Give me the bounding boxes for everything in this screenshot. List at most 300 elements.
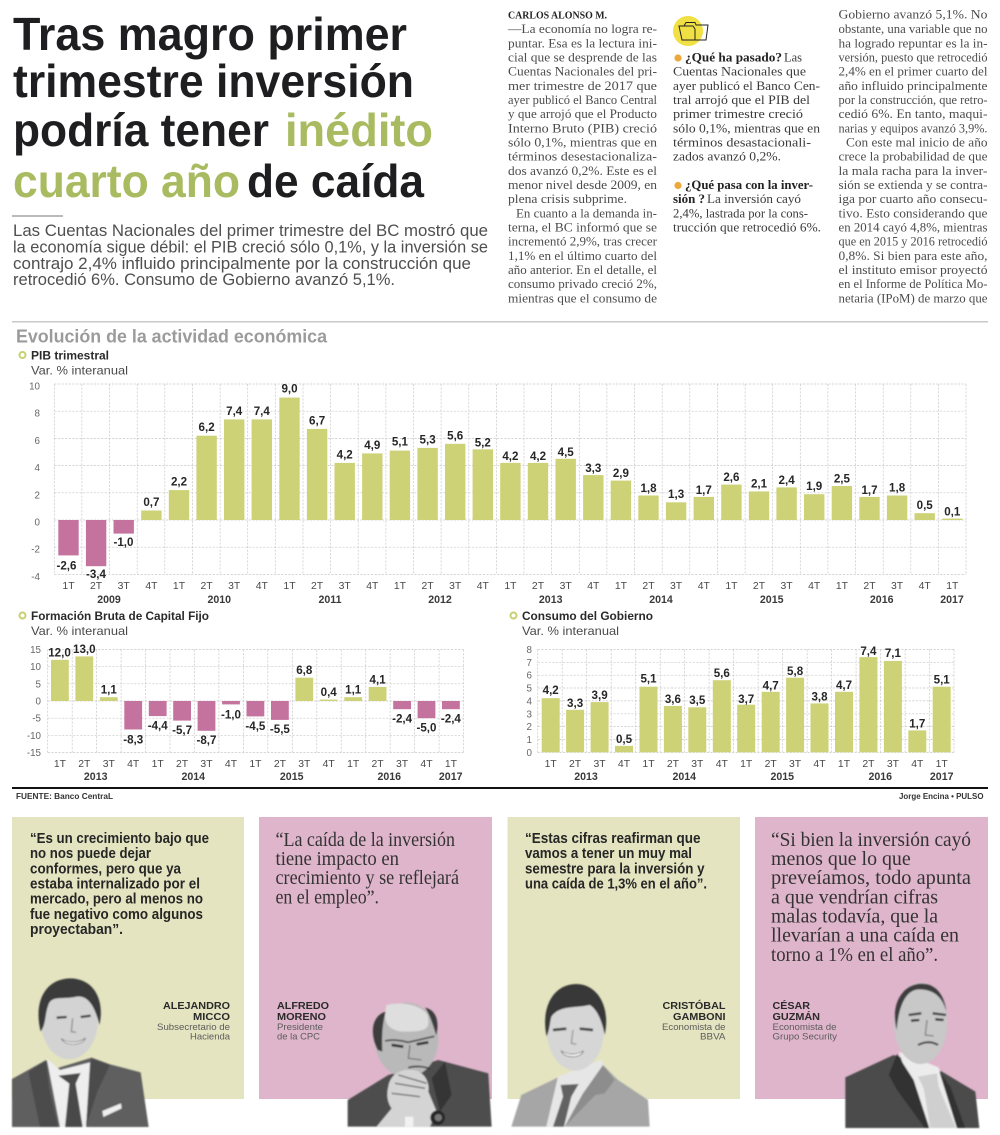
standfirst text block — [12, 216, 488, 289]
panel: Alfredo Moreno quote — [259, 817, 492, 1127]
name and role: de la CPC — [277, 1032, 320, 1043]
quote text: torno a 1% en el año”. — [771, 944, 938, 966]
portrait: César Guzmán — [845, 983, 979, 1128]
value labels: 5,3 — [420, 433, 436, 446]
x axis quarter labels: 1T — [394, 581, 407, 592]
article column 3: la mala racha para la inver- — [838, 164, 988, 178]
x axis quarter labels — [545, 759, 948, 770]
x axis year labels: 2014 — [673, 771, 696, 783]
x axis quarter labels: 4T — [366, 581, 379, 592]
chart heading: Consumo del Gobierno — [510, 609, 653, 638]
y axis labels: 4 — [527, 696, 533, 707]
x axis quarter labels: 4T — [225, 759, 238, 770]
value labels: 2,4 — [779, 474, 795, 487]
x axis year labels: 2016 — [378, 771, 401, 783]
article column 2: key questions: La inversión cayó — [707, 192, 801, 206]
x axis quarter labels: 3T — [449, 581, 462, 592]
quote text: menos que lo que — [771, 848, 911, 870]
title: trimestre inversión — [13, 55, 414, 107]
x axis quarter labels: 4T — [323, 759, 335, 770]
article column 2: key questions — [673, 50, 821, 235]
name and role: Grupo Security — [772, 1032, 837, 1043]
credit: Jorge Encina • PULSO — [899, 791, 984, 801]
x axis year labels: 2013 — [84, 771, 108, 783]
y axis labels — [29, 382, 41, 583]
value labels: -2,6 — [57, 560, 77, 572]
name and role: GAMBONI — [673, 1012, 726, 1023]
x axis quarter labels: 2T — [201, 581, 213, 592]
chart heading: Consumo del Gobierno: Var. % interanual — [522, 624, 619, 638]
article column 1: mientras que el consumo de — [508, 291, 657, 305]
name and role — [157, 1001, 231, 1043]
quote text: mercado, pero al menos no — [30, 892, 203, 908]
x axis quarter labels: 2T — [642, 581, 655, 592]
y axis labels: -4 — [31, 572, 41, 583]
x axis quarter labels: 3T — [560, 581, 572, 592]
x axis quarter labels: 1T — [249, 759, 262, 770]
portrait: Alejandro Micco — [12, 978, 149, 1127]
quote text: proyectaban”. — [30, 922, 123, 938]
x axis quarter labels: 3T — [789, 759, 802, 770]
article column 2: key questions: términos desastacionali- — [673, 136, 811, 150]
article column 1: 1,1% en el último cuarto del — [508, 249, 658, 263]
quote text: conformes, pero que ya — [30, 861, 182, 877]
value labels: 5,8 — [787, 665, 804, 678]
value labels: 2,2 — [171, 476, 187, 489]
x axis year labels: 2015 — [771, 771, 794, 783]
article column 3: año influido principalmente — [838, 79, 988, 93]
standfirst text block: Las Cuentas Nacionales del primer trimestre del BC mostró que — [13, 222, 488, 240]
article column 3: narias y equipos avanzó 3,9%. — [838, 121, 988, 135]
positive bars — [141, 398, 962, 520]
y axis labels: 0 — [36, 696, 42, 708]
x axis quarter labels: 1T — [725, 581, 738, 592]
value labels: 12,0 — [48, 646, 71, 659]
value labels: 0,5 — [616, 733, 633, 746]
value labels: 1,1 — [345, 684, 362, 697]
x axis quarter labels: 3T — [781, 581, 793, 592]
value labels: 5,1 — [392, 436, 409, 448]
x axis quarter labels: 3T — [298, 759, 311, 770]
value labels: -5,7 — [172, 724, 192, 737]
value labels: 4,5 — [558, 446, 574, 459]
article column 3: en el Informe de Política Mo- — [838, 277, 988, 291]
x axis quarter labels: 2T — [372, 759, 384, 770]
panel: Cristóbal Gamboni quote — [508, 817, 740, 1127]
x axis quarter labels: 3T — [103, 759, 116, 770]
value labels: 2,1 — [751, 478, 768, 490]
quote text: “La caída de la inversión — [276, 829, 455, 851]
x axis year labels — [84, 771, 463, 783]
y axis labels: 1 — [527, 735, 532, 746]
quote text — [771, 829, 971, 966]
value labels: 6,7 — [309, 414, 325, 427]
title: inédito — [285, 104, 433, 156]
y axis labels: 5 — [527, 684, 533, 694]
x axis quarter labels: 1T — [836, 581, 849, 592]
x axis quarter labels: 1T — [642, 759, 655, 770]
value labels: 4,2 — [337, 448, 353, 461]
article column 2: key questions: ¿Qué ha pasado? — [685, 50, 782, 64]
article column 1: mer trimestre de 2017 que — [508, 79, 657, 93]
y axis labels: 6 — [527, 671, 533, 682]
value labels: 7,4 — [860, 645, 877, 658]
y axis labels: -2 — [31, 545, 40, 556]
y axis labels: 15 — [30, 645, 42, 656]
article column 1: términos desestacionaliza- — [508, 150, 657, 164]
value labels: 3,7 — [738, 693, 754, 706]
x axis quarter labels: 3T — [691, 759, 704, 770]
y axis labels: -5 — [32, 714, 42, 725]
article column 3: cedió 6%. En tanto, maqui- — [838, 107, 988, 121]
value labels: 4,1 — [370, 673, 386, 686]
quote text: crecimiento y se reflejará — [276, 867, 459, 889]
x axis quarter labels: 1T — [283, 581, 296, 592]
value labels: 3,3 — [567, 697, 584, 710]
name and role: ALFREDO — [277, 1001, 329, 1012]
x axis year labels: 2017 — [940, 594, 964, 606]
article column 2: key questions: Cuentas Nacionales que — [673, 65, 806, 79]
x axis quarter labels: 1T — [173, 581, 186, 592]
article column 3: obstante, una variable que no — [838, 22, 988, 36]
article column 1: cial que se desprende de las — [508, 50, 657, 64]
article column 1: Interno Bruto (PIB) creció — [508, 121, 657, 135]
negative bars — [124, 701, 460, 731]
x axis quarter labels: 1T — [740, 759, 753, 770]
x axis quarter labels: 2T — [176, 759, 189, 770]
value labels: -2,4 — [392, 713, 413, 726]
x axis year labels: 2017 — [439, 771, 463, 783]
value labels: -1,0 — [114, 536, 133, 549]
quote text: vamos a tener un muy mal — [525, 846, 692, 862]
chart: Consumo del Gobierno — [510, 609, 954, 783]
quote text: no nos puede dejar — [30, 846, 151, 862]
value labels: -4,5 — [245, 720, 266, 733]
negative bars — [58, 520, 134, 566]
x axis quarter labels: 1T — [152, 759, 164, 770]
x axis year labels: 2012 — [428, 594, 452, 606]
x axis quarter labels: 4T — [919, 581, 931, 592]
x axis year labels: 2014 — [182, 771, 205, 783]
y axis labels: 6 — [35, 436, 41, 447]
value labels: 4,2 — [543, 684, 559, 697]
article column 1: puntar. Esa es la lectura ini- — [508, 36, 657, 50]
article column 2: key questions: ayer publicó el Banco Cen- — [673, 79, 820, 93]
quote text: estaba internalizado por el — [30, 876, 200, 892]
x axis quarter labels: 2T — [863, 581, 876, 592]
value labels: 5,1 — [640, 673, 657, 686]
x axis year labels: 2016 — [870, 594, 894, 606]
article column 2: key questions: sólo 0,1%, mientras que en — [673, 121, 821, 135]
article column 1 — [507, 10, 658, 305]
name and role — [772, 999, 837, 1043]
x axis quarter labels: 1T — [347, 759, 360, 770]
x axis quarter labels: 4T — [127, 759, 140, 770]
x axis quarter labels: 3T — [670, 581, 683, 592]
value labels: 5,2 — [475, 436, 491, 449]
value labels: 5,6 — [714, 667, 730, 680]
article column 3: que en 2015 y 2016 retrocedió — [838, 235, 988, 249]
x axis quarter labels: 1T — [445, 759, 458, 770]
value labels: 0,4 — [321, 686, 337, 699]
title — [13, 8, 433, 207]
article column 1: plena crisis subprime. — [508, 192, 627, 206]
x axis quarter labels: 1T — [545, 759, 557, 770]
y axis labels: -15 — [27, 748, 42, 759]
name and role: Economista de — [772, 1022, 836, 1033]
article column 3: netaria (IPoM) de marzo que — [838, 291, 988, 305]
x axis year labels: 2010 — [208, 594, 231, 606]
y axis labels: 4 — [35, 463, 41, 474]
article column 3: iga por cuarto año consecu- — [838, 192, 988, 206]
icon: folder on yellow circle — [673, 16, 708, 46]
article column 2: key questions: 2,4%, lastrada por la cons- — [673, 206, 808, 220]
positive bars — [51, 656, 386, 701]
article column 1: ayer publicó el Banco Central — [508, 93, 657, 107]
x axis quarter labels: 2T — [274, 759, 287, 770]
article column 3 — [838, 8, 988, 305]
value labels: 4,7 — [763, 680, 779, 692]
x axis quarter labels: 1T — [54, 759, 67, 770]
name and role: GUZMÁN — [772, 1010, 820, 1023]
x axis quarter labels: 3T — [887, 759, 900, 770]
chart heading: FBCF: Formación Bruta de Capital Fijo — [31, 609, 209, 623]
value labels: 1,7 — [861, 484, 878, 497]
quote text: “Es un crecimiento bajo que — [30, 831, 209, 847]
quote text: preveíamos, todo apunta — [771, 867, 971, 889]
y axis labels: 2 — [35, 490, 40, 501]
name and role: MICCO — [193, 1012, 230, 1023]
article column 1: dos avanzó 0,2%. Este es el — [508, 164, 658, 178]
chart heading: PIB trimestral: PIB trimestral — [31, 348, 109, 362]
article column 2: key questions: Las — [784, 50, 802, 64]
name and role: CRISTÓBAL — [662, 999, 726, 1012]
name and role: Subsecretario de — [157, 1022, 230, 1033]
article column 3: crece la probabilidad de que — [838, 150, 988, 164]
x axis quarter labels: 4T — [420, 759, 433, 770]
value labels: 4,9 — [364, 439, 381, 452]
article column 3: 2,4% en el primer cuarto del — [838, 65, 988, 79]
x axis quarter labels: 4T — [911, 759, 924, 770]
x axis quarter labels: 1T — [62, 581, 75, 592]
article column 1: consumo privado creció 2%, — [508, 277, 657, 291]
y axis labels: 3 — [527, 709, 533, 720]
quote text: a que vendrían cifras — [771, 886, 938, 908]
x axis quarter labels: 4T — [256, 581, 269, 592]
chart heading: PIB trimestral: Var. % interanual — [31, 364, 128, 378]
x axis quarter labels: 3T — [594, 759, 606, 770]
value labels: 3,5 — [689, 694, 706, 707]
panel: Alejandro Micco quote — [12, 817, 244, 1127]
title: podría tener — [13, 104, 269, 156]
value labels: -8,7 — [197, 734, 216, 747]
article column 3: versión, puesto que retrocedió — [838, 50, 988, 64]
article column 1: Cuentas Nacionales del pri- — [508, 65, 657, 79]
value labels: 4,2 — [530, 450, 546, 463]
x axis quarter labels: 3T — [118, 581, 130, 592]
x axis quarter labels: 2T — [765, 759, 777, 770]
article column 3: tivo. Esto considerando que — [838, 206, 988, 220]
x axis quarter labels — [62, 581, 959, 592]
value labels: -4,4 — [148, 720, 168, 733]
chart: PIB trimestral — [20, 348, 966, 606]
name and role: BBVA — [700, 1032, 726, 1043]
article column 2: key questions: zados avanzó 0,2%. — [673, 150, 781, 164]
quote text — [525, 831, 707, 892]
y axis labels: 2 — [527, 722, 532, 733]
quote text: en el empleo”. — [276, 886, 379, 908]
x axis year labels: 2017 — [930, 771, 954, 783]
article column 1: CARLOS ALONSO M. — [508, 10, 607, 22]
y axis labels: 8 — [35, 409, 41, 420]
value labels: -5,0 — [417, 722, 436, 735]
value labels: -8,3 — [123, 734, 144, 746]
article column 1: año anterior. En el detalle, el — [508, 263, 658, 277]
x axis quarter labels: 3T — [200, 759, 213, 770]
quote text: una caída de 1,3% en el año”. — [525, 876, 707, 892]
value labels: 0,1 — [944, 506, 961, 518]
value labels: 3,6 — [665, 693, 682, 706]
name and role: Presidente — [277, 1022, 323, 1033]
portrait: Alfredo Moreno — [348, 1003, 492, 1127]
x axis quarter labels: 4T — [587, 581, 600, 592]
chart heading: PIB trimestral — [20, 348, 128, 378]
value labels: 1,1 — [101, 684, 117, 697]
name and role — [662, 999, 726, 1043]
y axis labels: -10 — [27, 731, 42, 742]
article column 1: terna, el BC informó que se — [508, 221, 657, 235]
article column 1: incrementó 2,9%, tras crecer — [508, 235, 658, 249]
value labels: 1,3 — [668, 488, 685, 501]
source note: FUENTE: Banco CentraL — [16, 791, 113, 801]
article column 3: en 2014 cayó 4,8%, mientras — [838, 221, 988, 235]
x axis year labels — [97, 594, 964, 606]
value labels: 3,3 — [585, 462, 602, 475]
x axis quarter labels: 1T — [946, 581, 959, 592]
quote text: “Estas cifras reafirman que — [525, 831, 700, 847]
x axis quarter labels: 2T — [90, 581, 103, 592]
standfirst text block: contrajo 2,4% influido principalmente por la construcción que — [13, 255, 471, 273]
x axis quarter labels: 4T — [813, 759, 826, 770]
x axis quarter labels: 1T — [936, 759, 948, 770]
article column 1: menor nivel desde 2009, en — [508, 178, 658, 192]
quote text — [276, 829, 459, 908]
x axis year labels: 2015 — [760, 594, 784, 606]
title: Tras magro primer — [13, 8, 407, 60]
article column 2: key questions: ¿Qué pasa con la inver- — [685, 178, 813, 192]
quote text — [30, 831, 209, 938]
x axis quarter labels: 4T — [808, 581, 821, 592]
article column 1: y que arrojó que el Producto — [508, 107, 657, 121]
title: de caída — [247, 155, 424, 207]
value labels: 1,8 — [640, 482, 657, 495]
x axis year labels — [574, 771, 954, 783]
x axis quarter labels: 1T — [615, 581, 628, 592]
article column 3: Con este mal inicio de año — [846, 136, 988, 150]
quote text: llevarían a una caída en — [771, 925, 959, 947]
value labels: 3,8 — [811, 690, 828, 704]
x axis quarter labels — [54, 759, 458, 770]
standfirst text block: retrocedió 6%. Consumo de Gobierno avanzó 5,1%. — [13, 271, 395, 289]
value labels: -2,4 — [441, 713, 461, 726]
value labels: -3,4 — [86, 568, 107, 581]
standfirst text block: la economía sigue débil: el PIB creció sólo 0,1%, y la inversión se — [13, 238, 488, 256]
value labels: 5,6 — [447, 429, 464, 442]
value labels: 3,9 — [592, 689, 608, 702]
y axis labels: 10 — [29, 382, 41, 392]
value labels: 5,1 — [934, 674, 950, 687]
y axis labels — [527, 645, 533, 759]
value labels: 1,7 — [909, 718, 925, 730]
panel: César Guzmán quote — [755, 817, 988, 1128]
x axis quarter labels: 2T — [667, 759, 680, 770]
x axis year labels: 2013 — [539, 594, 563, 606]
article column 3: 0,8%. Si bien para este año, — [838, 249, 988, 263]
x axis quarter labels: 4T — [618, 759, 631, 770]
x axis quarter labels: 3T — [339, 581, 351, 592]
value labels: 9,0 — [281, 382, 298, 396]
x axis year labels: 2011 — [319, 594, 342, 606]
quote text: tiene impacto en — [276, 848, 399, 870]
value labels: -5,5 — [270, 723, 290, 736]
value labels: 1,9 — [806, 480, 823, 493]
value labels: 7,4 — [254, 405, 270, 418]
value labels: 7,4 — [226, 405, 243, 418]
y axis labels: 8 — [527, 645, 533, 656]
chart: Formación Bruta de Capital Fijo — [20, 609, 464, 783]
x axis quarter labels: 1T — [838, 759, 851, 770]
x axis year labels: 2016 — [869, 771, 892, 783]
x axis year labels: 2009 — [97, 594, 121, 606]
value labels: -1,0 — [221, 708, 241, 721]
value labels: 4,7 — [836, 679, 852, 692]
article column 2: key questions: sión ? — [673, 192, 705, 206]
x axis quarter labels: 2T — [862, 759, 875, 770]
x axis quarter labels: 2T — [78, 759, 91, 770]
article column 1: sólo 0,1%, mientras que en — [508, 136, 658, 150]
value labels — [543, 645, 950, 746]
quote text: fue negativo como algunos — [30, 907, 203, 923]
value labels: 0,5 — [917, 499, 933, 512]
x axis quarter labels: 2T — [753, 581, 766, 592]
name and role: ALEJANDRO — [163, 1001, 230, 1012]
quote text: “Si bien la inversión cayó — [771, 829, 971, 851]
y axis labels: 0 — [527, 748, 533, 759]
bars — [542, 657, 951, 752]
y axis labels: 5 — [36, 679, 42, 690]
value labels: 1,7 — [696, 484, 712, 497]
article column 2: key questions: trucción que retrocedió 6%. — [673, 221, 821, 235]
x axis quarter labels: 4T — [477, 581, 490, 592]
x axis quarter labels: 3T — [396, 759, 409, 770]
portrait: Cristóbal Gamboni — [511, 984, 650, 1127]
x axis quarter labels: 4T — [716, 759, 729, 770]
x axis year labels: 2013 — [574, 771, 598, 783]
x axis quarter labels: 3T — [891, 581, 904, 592]
article column 3: por la construcción, que retro- — [838, 93, 988, 107]
title: cuarto año — [13, 155, 240, 207]
article column 1: —La economía no logra re- — [507, 22, 657, 36]
name and role — [277, 1001, 329, 1043]
name and role: Economista de — [662, 1022, 726, 1033]
chart heading: Consumo del Gobierno: Consumo del Gobierno — [522, 609, 653, 623]
value labels: 13,0 — [73, 643, 96, 656]
x axis year labels: 2014 — [649, 594, 673, 606]
value labels: 4,2 — [502, 450, 518, 463]
chart section heading: Evolución de la actividad económica — [16, 326, 328, 346]
x axis quarter labels: 2T — [532, 581, 545, 592]
x axis year labels: 2015 — [280, 771, 304, 783]
